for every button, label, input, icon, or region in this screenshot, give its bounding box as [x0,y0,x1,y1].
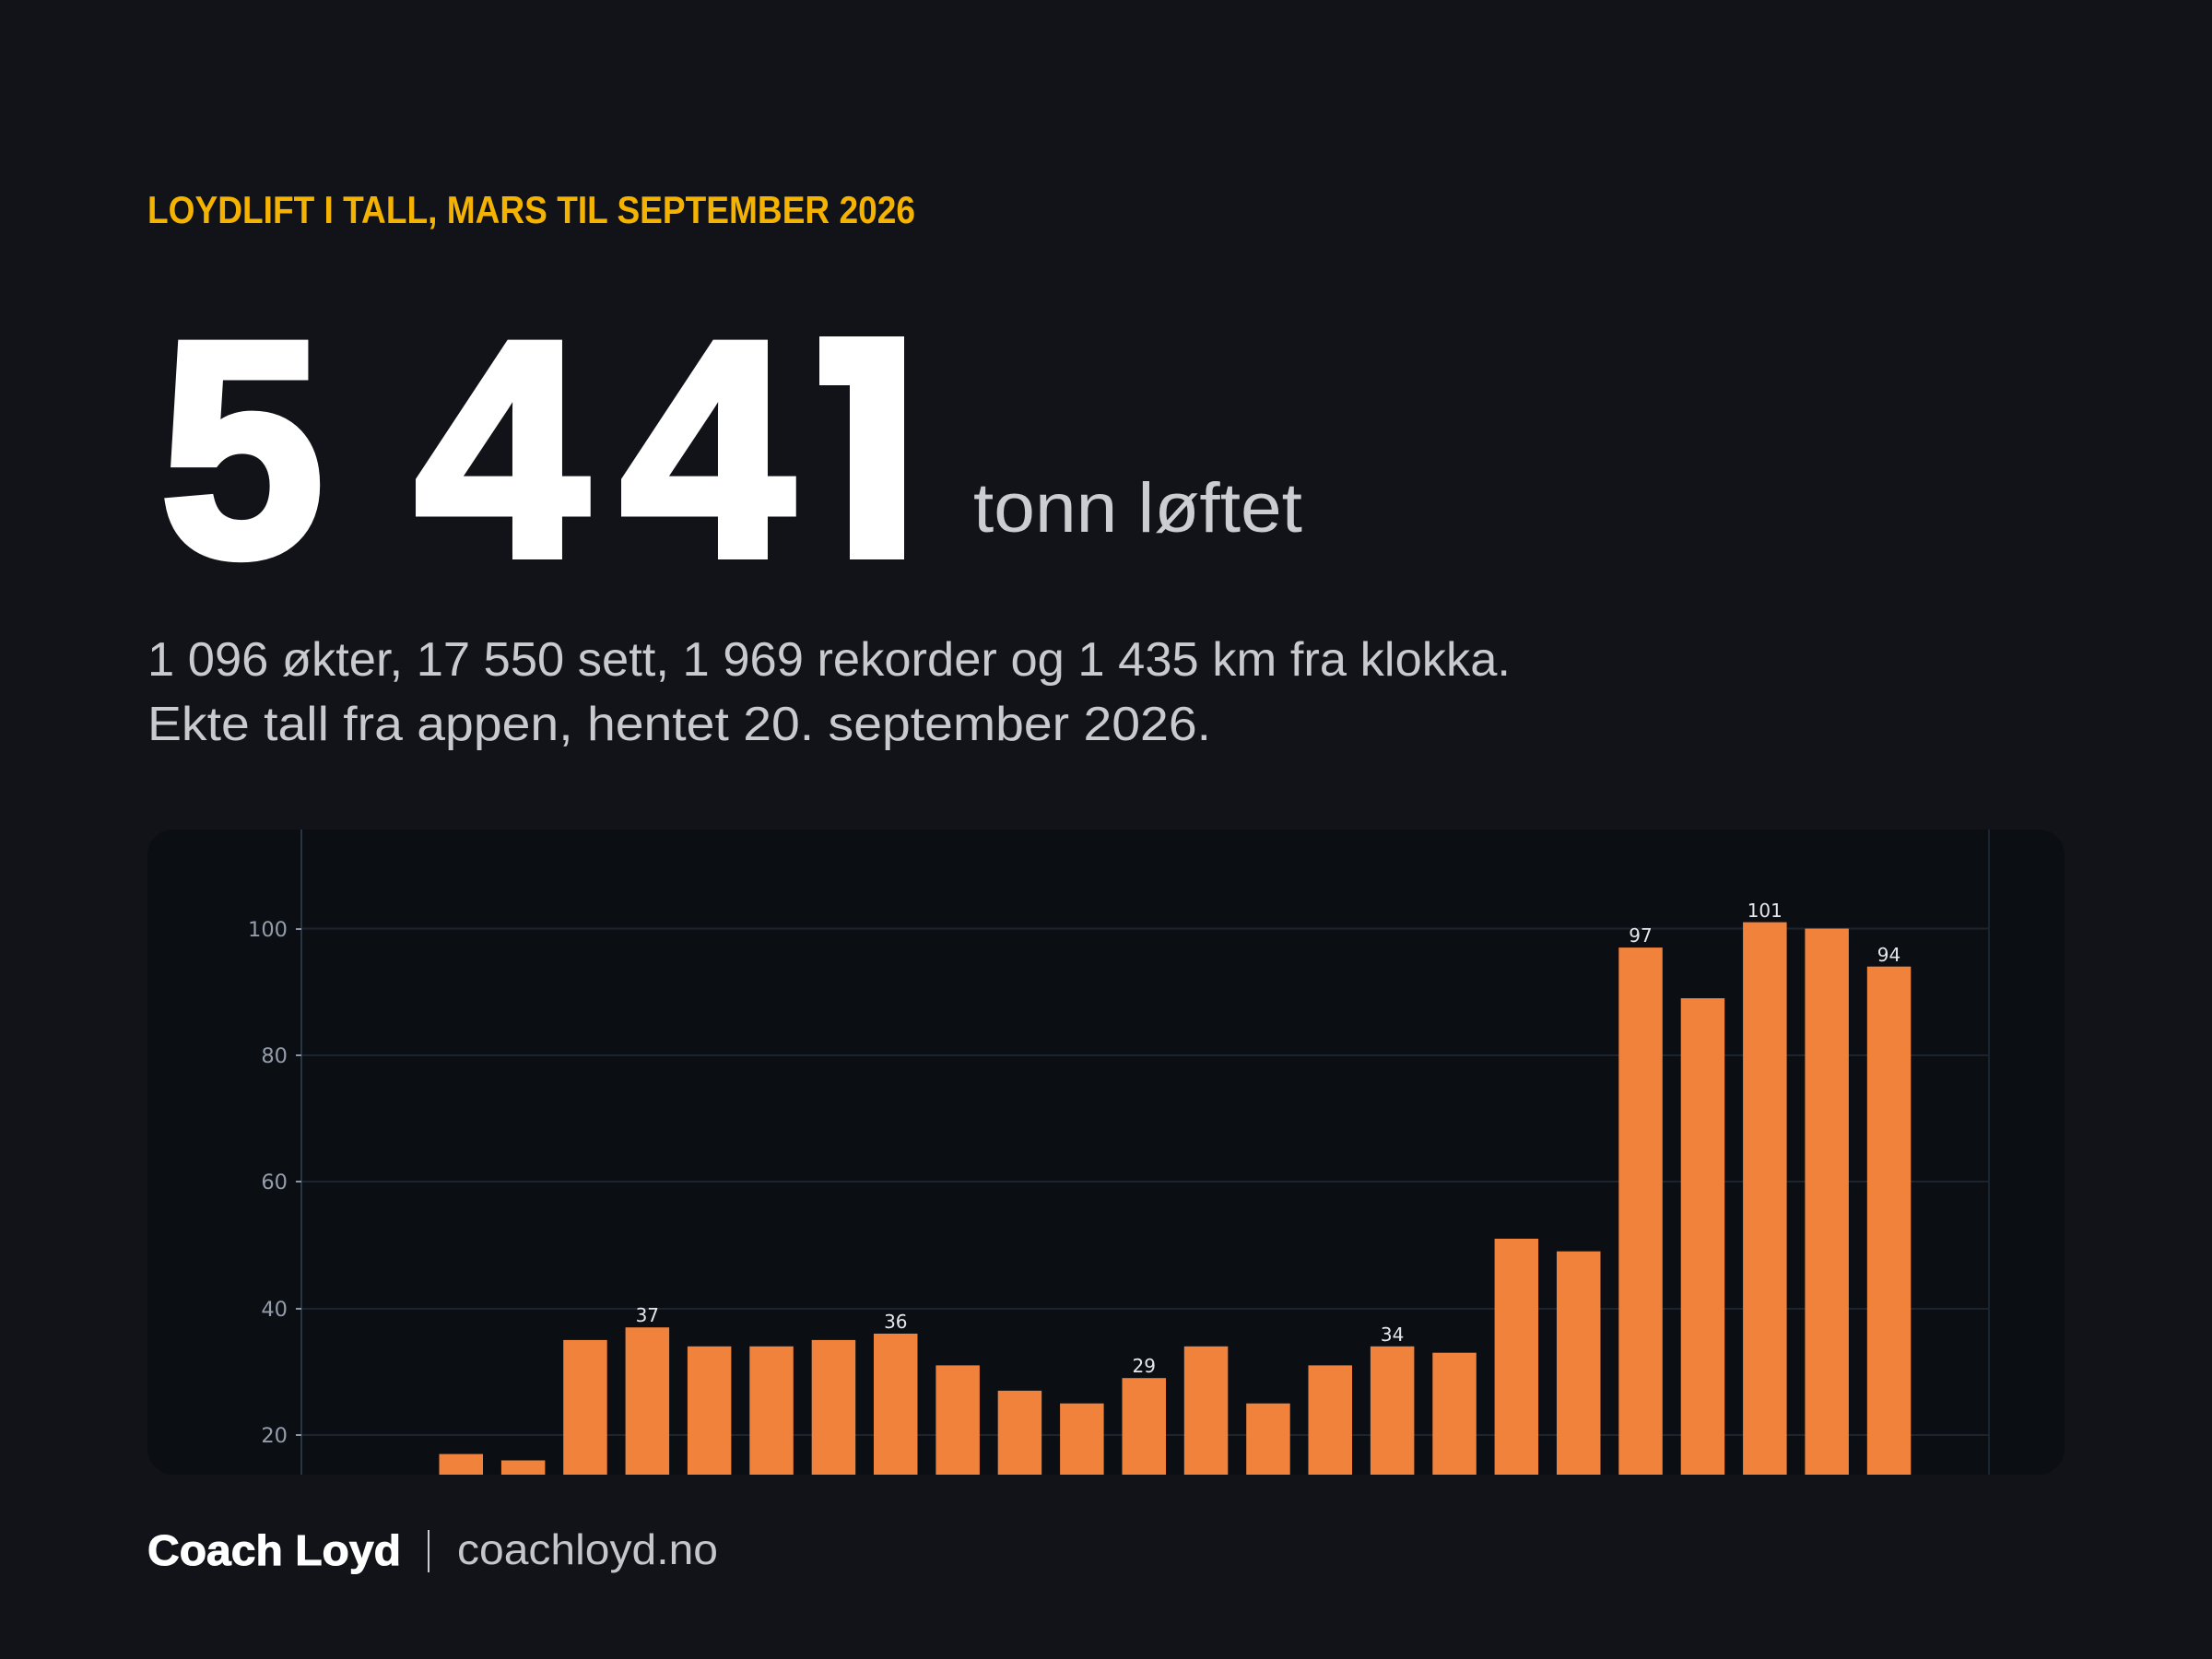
big number: 4 [416,278,590,620]
big number: 4 [621,278,795,620]
bar value labels: 97 [1629,924,1653,947]
bar value labels: 34 [1381,1324,1404,1346]
summary text [147,633,1511,751]
big number: 5 [160,277,324,619]
bar value labels: 37 [636,1304,659,1326]
y axis labels: 60 [261,1171,288,1194]
y axis labels: 40 [261,1298,288,1322]
big number: 1 [735,277,1006,619]
y axis labels: 80 [261,1044,288,1068]
bar value labels: 101 [1747,900,1783,922]
summary text: 1 096 økter, 17 550 sett, 1 969 rekorder og 1 435 km fra klokka. [147,633,1511,687]
y axis labels [248,918,288,1448]
unit label: tonn løftet [973,469,1302,547]
bars [439,923,1911,1488]
y axis labels: 100 [248,918,288,942]
footer: brand: Coach Loyd [147,1526,401,1574]
footer: brand [147,1525,718,1574]
panel: bar chart [251,830,1990,1475]
footer: brand: coachloyd.no [457,1525,718,1573]
y axis labels: 20 [261,1424,288,1448]
bar value labels: 29 [1132,1355,1156,1377]
heading: eyebrow: LOYDLIFT I TALL, MARS TIL SEPTEMBER 2026 [147,188,915,231]
bar value labels: 36 [884,1311,908,1333]
bar value labels: 94 [1877,944,1900,966]
bar value labels [636,900,1900,1377]
summary text: Ekte tall fra appen, hentet 20. september 2026. [147,698,1211,751]
big number [164,336,904,562]
